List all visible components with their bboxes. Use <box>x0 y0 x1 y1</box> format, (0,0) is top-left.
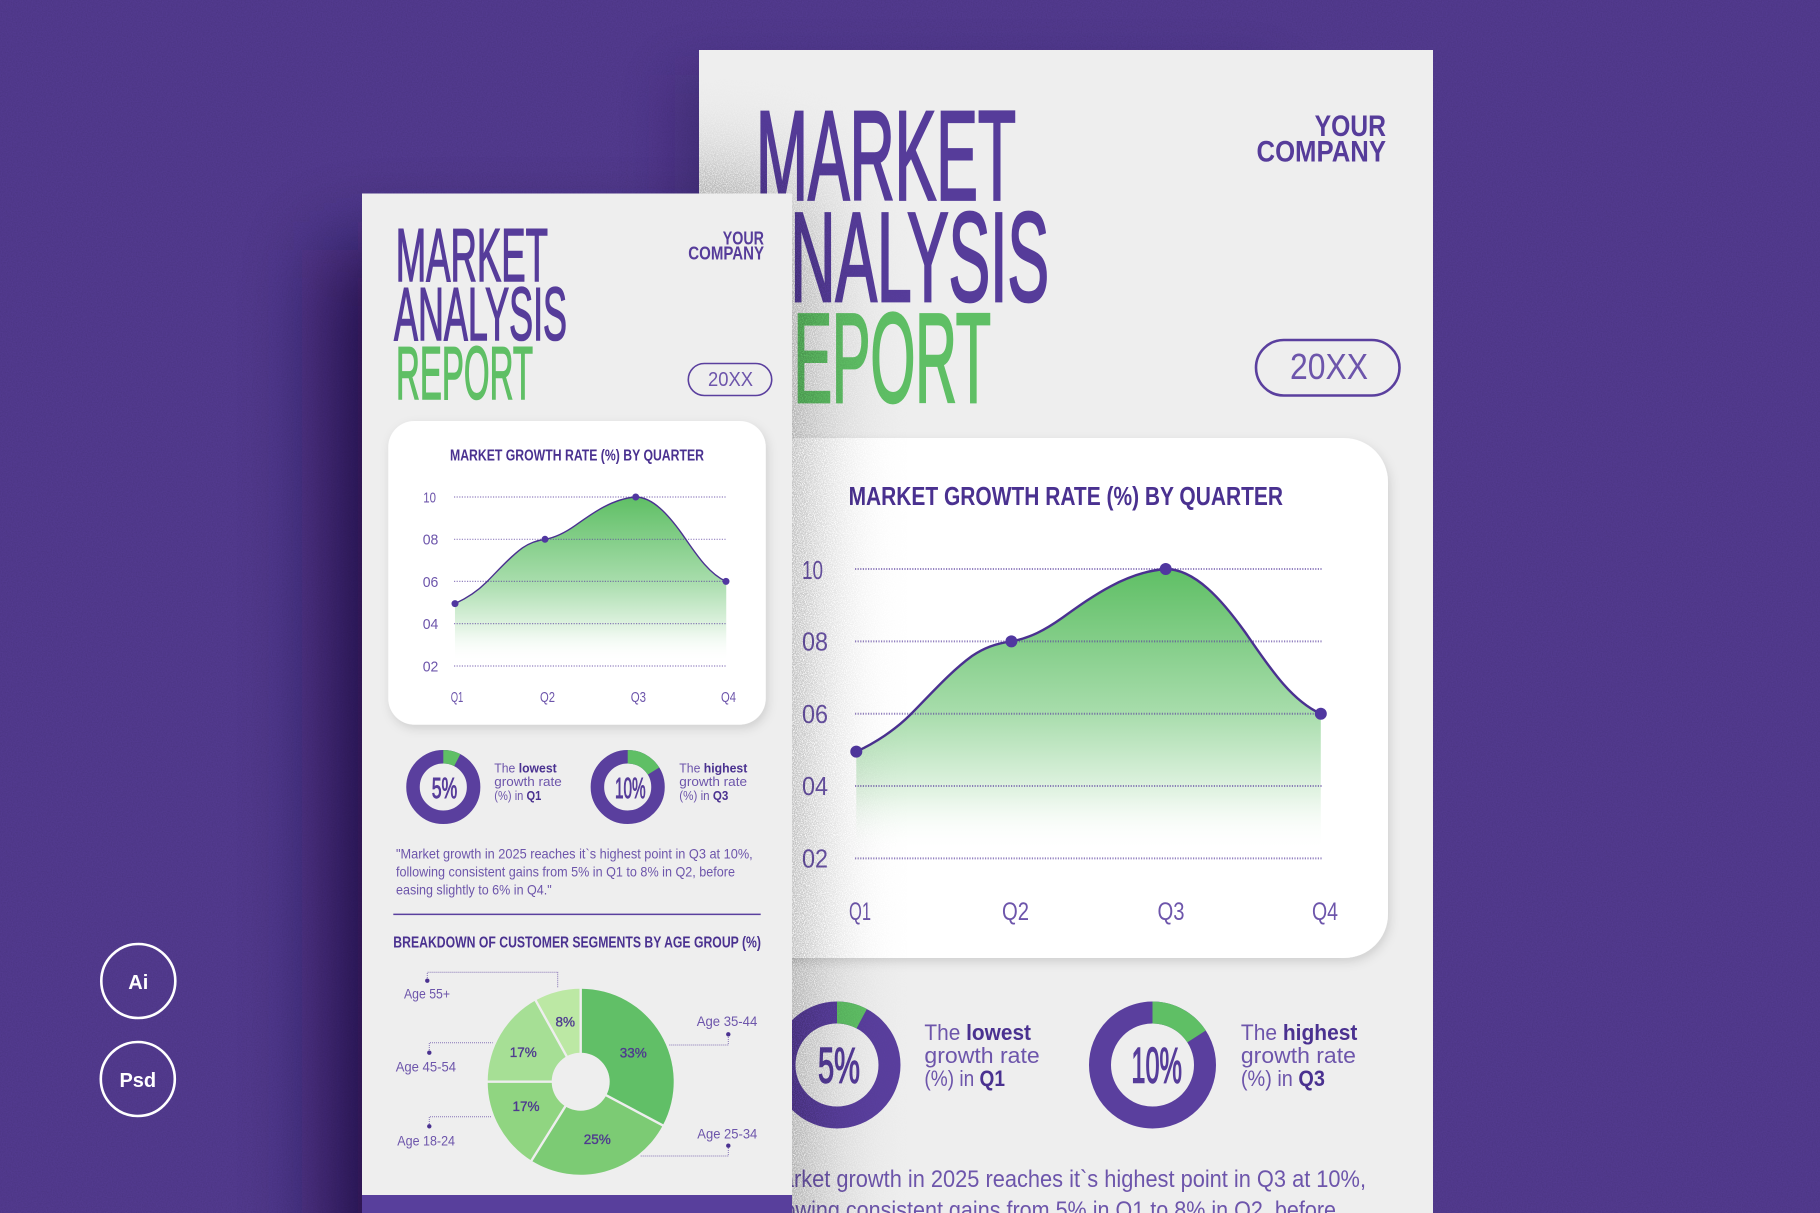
donut caption: lowest, large: (%) in Q1 <box>924 1066 1005 1091</box>
summary text: small: following consistent gains from 5% in Q1 to 8% in Q2, before <box>396 863 735 879</box>
x axis labels: large: Q2 <box>1002 898 1029 926</box>
donut caption: lowest, large <box>924 1020 1040 1091</box>
y axis labels: large <box>802 555 828 874</box>
donut caption: lowest, small: growth rate <box>494 774 562 789</box>
x axis labels: small <box>451 690 736 706</box>
donut: lowest rate, small: 5% <box>432 773 457 805</box>
year pill: large: 20XX <box>1290 346 1368 387</box>
y axis labels: large: 06 <box>802 699 828 729</box>
donut caption: highest, large: growth rate <box>1241 1043 1356 1068</box>
donut caption: highest, small: growth rate <box>679 774 747 789</box>
company name: large <box>1258 115 1386 162</box>
chart heading: large: MARKET GROWTH RATE (%) BY QUARTER <box>849 481 1283 511</box>
company name: small <box>688 228 764 263</box>
footer band <box>362 1195 792 1213</box>
donut caption: highest, small <box>679 761 748 803</box>
y axis labels: large: 10 <box>802 555 823 585</box>
donut caption: lowest, small: (%) in Q1 <box>494 788 541 803</box>
summary text: small <box>396 845 753 897</box>
callout: Age 25-34 <box>640 1126 758 1156</box>
y axis labels: small: 06 <box>423 574 438 591</box>
donut caption: lowest, small: The lowest <box>494 761 557 776</box>
format badge: Ai: Ai <box>128 972 148 994</box>
panel: large back sheet: ANALYSIS <box>749 186 1049 328</box>
summary text: small: "Market growth in 2025 reaches it`s highest point in Q3 at 10%, <box>396 845 753 861</box>
x axis labels: large: Q1 <box>849 898 871 926</box>
x axis labels: large: Q3 <box>1158 898 1184 926</box>
x axis labels: large <box>850 902 1338 924</box>
donut caption: highest, large: (%) in Q3 <box>1241 1066 1325 1091</box>
y axis labels: small: 02 <box>423 658 438 675</box>
callout: Age 45-54 <box>396 1043 493 1074</box>
year pill: small: 20XX <box>708 368 753 391</box>
callout: Age 35-44: Age 35-44 <box>697 1014 758 1029</box>
chart heading: small: MARKET GROWTH RATE (%) BY QUARTER <box>450 447 704 464</box>
y axis labels: small: 04 <box>423 616 438 633</box>
format badge: Psd <box>101 1042 175 1116</box>
year pill: small <box>688 364 772 396</box>
pie chart: customer segments: 17% <box>510 1045 537 1060</box>
format badge: Psd: Psd <box>119 1070 156 1092</box>
y axis labels: large: 02 <box>802 844 828 874</box>
donut: lowest rate, small <box>413 757 474 817</box>
donut caption: highest, small: The highest <box>679 761 748 776</box>
donut caption: highest, small: (%) in Q3 <box>679 788 728 803</box>
callout: Age 55+ <box>404 972 558 1002</box>
panel: small front sheet <box>362 194 792 1213</box>
pie chart: customer segments: 33% <box>620 1046 647 1060</box>
summary text: small: easing slightly to 6% in Q4." <box>396 881 552 897</box>
area chart: large <box>850 563 1327 858</box>
panel: small front sheet: ANALYSIS <box>394 272 567 356</box>
callout: Age 55+: Age 55+ <box>404 987 450 1002</box>
title: large: REPORT <box>752 287 991 429</box>
pie chart: customer segments <box>485 986 674 1175</box>
company name: small: YOUR <box>723 228 764 248</box>
callout: Age 35-44 <box>669 1014 758 1045</box>
y axis labels: small <box>423 489 438 675</box>
company name: small: COMPANY <box>688 243 764 263</box>
panel: small chart card <box>388 421 766 725</box>
company name: large: YOUR <box>1315 110 1386 143</box>
x axis labels: large: Q4 <box>1312 898 1338 926</box>
donut caption: highest, large: The highest <box>1241 1020 1358 1045</box>
donut: highest rate, large <box>1100 1012 1205 1118</box>
summary text: large: "Market growth in 2025 reaches it`s highest point in Q3 at 10%, <box>756 1166 1366 1193</box>
title: large <box>760 110 1047 404</box>
donut caption: lowest, large: growth rate <box>924 1043 1040 1068</box>
y axis labels: small: 08 <box>423 532 438 549</box>
area chart: small <box>452 494 730 666</box>
title: small <box>394 213 567 415</box>
panel: large back sheet <box>699 50 1433 1213</box>
format badge: Ai <box>101 944 175 1018</box>
pie chart: customer segments: 25% <box>584 1132 611 1147</box>
pie chart: customer segments: 8% <box>556 1014 575 1030</box>
company name: large: COMPANY <box>1256 136 1386 168</box>
donut: highest rate, large: 10% <box>1131 1038 1182 1094</box>
pie chart heading: BREAKDOWN OF CUSTOMER SEGMENTS BY AGE GROUP (%) <box>393 935 761 952</box>
y axis labels: large: 08 <box>802 626 828 656</box>
donut caption: lowest, large: The lowest <box>924 1020 1032 1045</box>
y axis labels: small: 10 <box>423 489 436 506</box>
donut: lowest rate, large: 5% <box>818 1038 860 1094</box>
callout: Age 18-24: Age 18-24 <box>397 1134 455 1149</box>
donut caption: highest, large <box>1241 1020 1358 1091</box>
donut: lowest rate, large <box>784 1012 890 1118</box>
donut: highest rate, small <box>597 757 658 817</box>
y axis labels: large: 04 <box>802 771 828 801</box>
year pill: large <box>1256 340 1400 396</box>
callout: Age 45-54: Age 45-54 <box>396 1059 456 1074</box>
donut caption: lowest, small <box>494 761 562 803</box>
title: small: REPORT <box>396 331 533 415</box>
title: large: MARKET <box>756 84 1016 226</box>
title: small: MARKET <box>396 213 548 297</box>
callout: Age 25-34: Age 25-34 <box>697 1126 758 1141</box>
x axis labels: small: Q3 <box>631 690 646 706</box>
x axis labels: small: Q2 <box>540 690 555 706</box>
pie chart: customer segments: 17% <box>512 1099 540 1114</box>
x axis labels: small: Q4 <box>721 690 736 706</box>
panel: large chart card <box>792 438 1393 965</box>
grainy shadow cast by front sheet <box>699 120 866 1213</box>
x axis labels: small: Q1 <box>451 690 463 706</box>
callout: Age 18-24 <box>397 1117 491 1149</box>
summary text: large <box>792 1169 1364 1213</box>
donut: highest rate, small: 10% <box>615 773 646 805</box>
